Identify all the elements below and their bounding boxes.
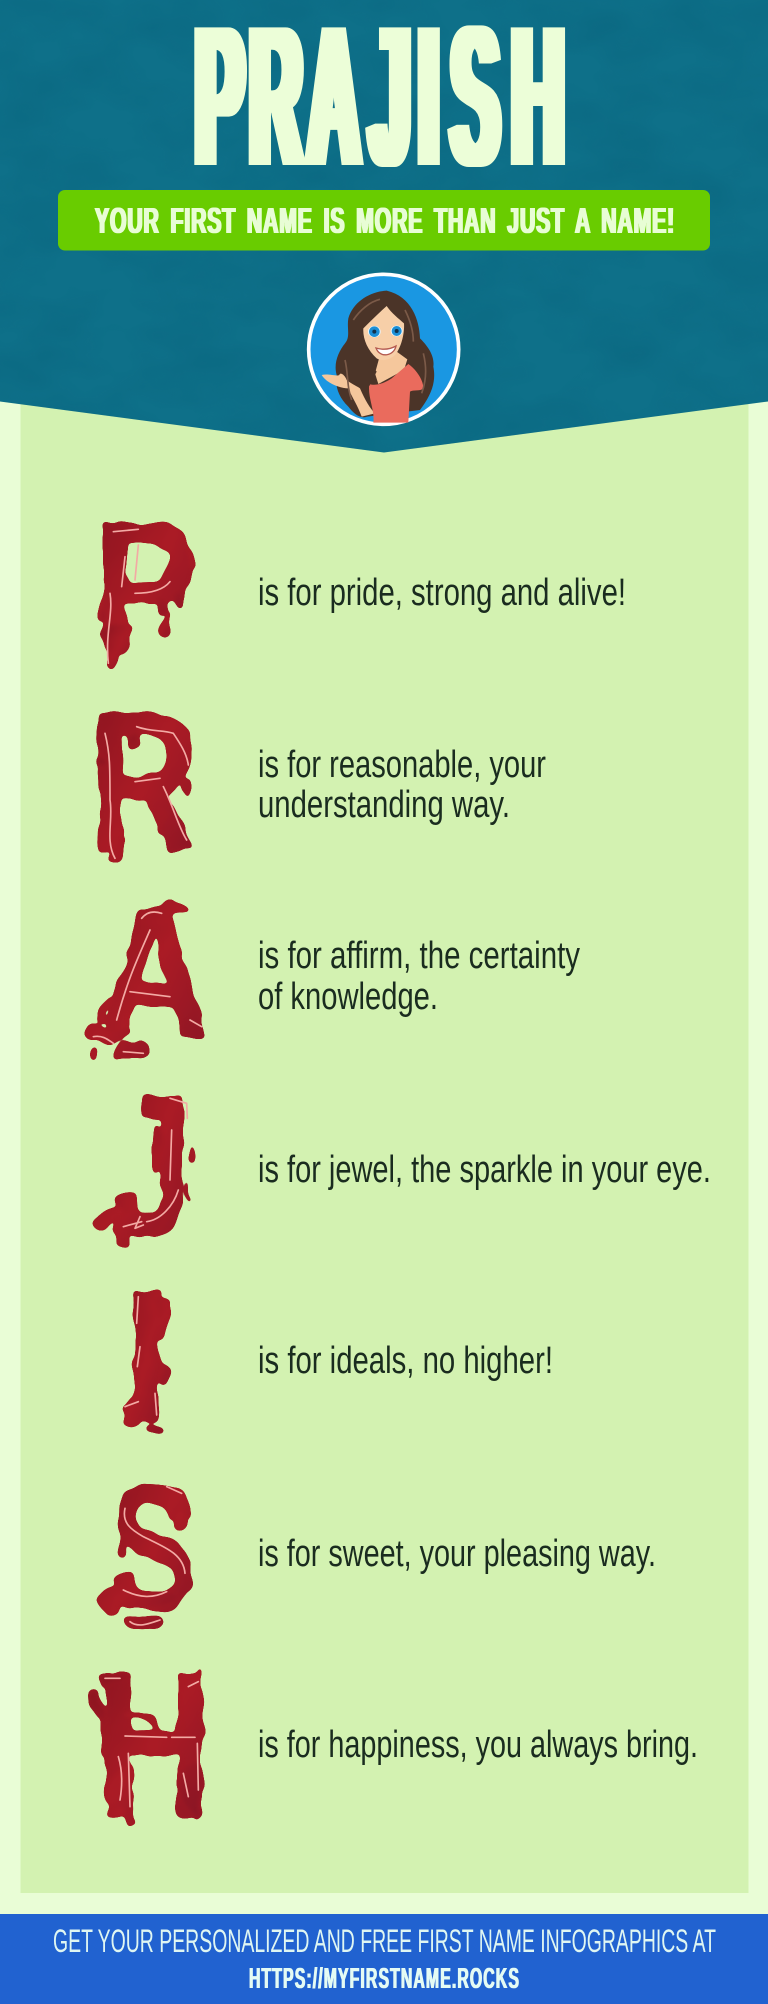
- panel: letters background: [20, 380, 748, 1893]
- footer link: HTTPS://MYFIRSTNAME.ROCKS: [249, 1963, 520, 1995]
- header banner: [0, 0, 768, 453]
- letter I: I: [124, 1251, 169, 1460]
- letter P: P: [93, 485, 197, 686]
- letter S: S: [110, 1448, 196, 1647]
- letter A: A: [99, 868, 209, 1077]
- letter J: [93, 1052, 197, 1278]
- footer bar: [0, 1914, 768, 2004]
- letter H: H: [96, 1629, 212, 1862]
- text: R lines: is for reasonable, your: [258, 744, 546, 786]
- text: R lines: understanding way.: [258, 784, 510, 826]
- text: I line: is for ideals, no higher!: [258, 1340, 553, 1382]
- letter S: [98, 1448, 196, 1647]
- icon: woman avatar: [309, 274, 459, 424]
- letter R: R: [90, 671, 197, 893]
- subtitle band: [58, 190, 710, 250]
- text: A lines: is for affirm, the certainty: [258, 935, 580, 977]
- text: R lines: [258, 744, 546, 826]
- letter J: J: [113, 1052, 191, 1278]
- text: A lines: [258, 935, 580, 1018]
- text: S line: is for sweet, your pleasing way.: [258, 1533, 656, 1575]
- text: A lines: of knowledge.: [258, 976, 438, 1018]
- text: P line: is for pride, strong and alive!: [258, 572, 626, 614]
